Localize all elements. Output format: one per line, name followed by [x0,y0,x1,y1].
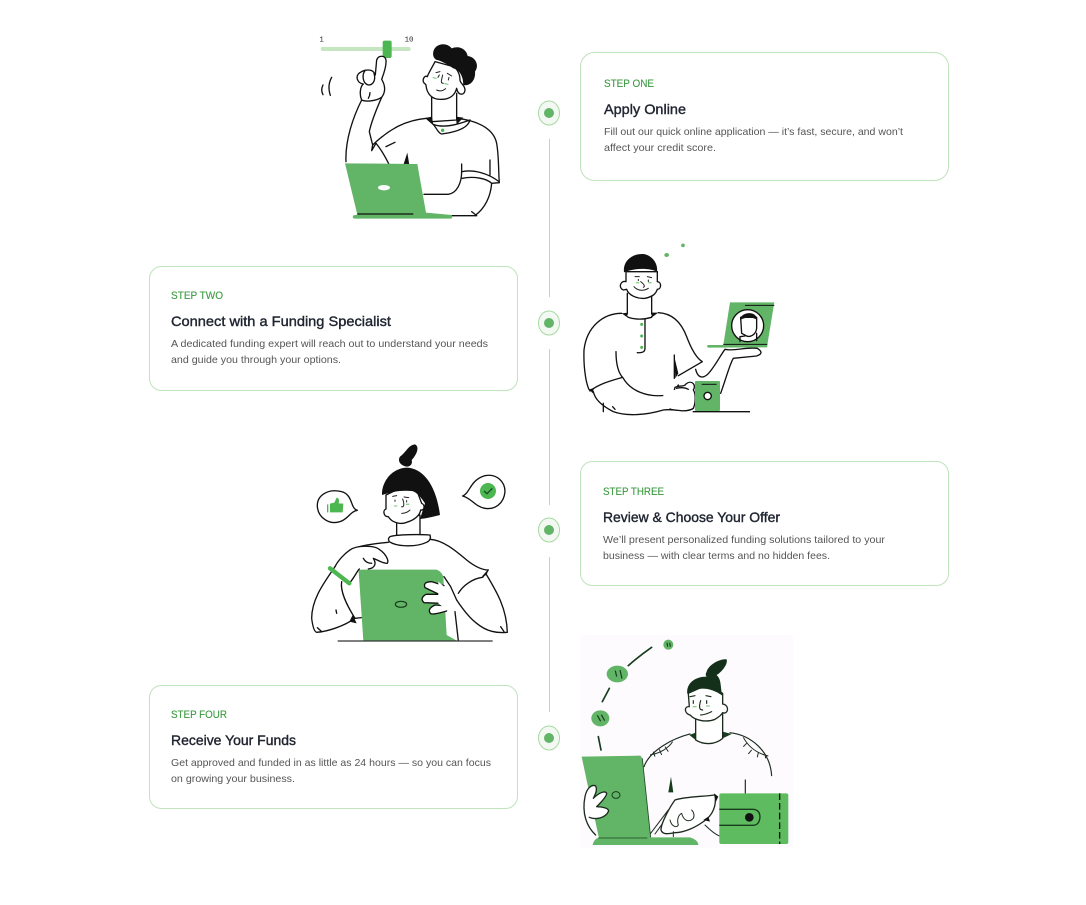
right hand fingers [422,577,457,614]
panel: step two card [150,266,518,390]
text block: step one description [604,126,903,154]
faint background [580,635,793,848]
illustration: man pointing at slider with laptop [319,36,499,219]
heading: receive your funds: Receive Your Funds [171,732,296,748]
hand holding tablet [584,786,609,835]
shirt buttons [640,323,643,349]
fist on mug [670,382,695,411]
torso and shirt [373,118,499,216]
label: step three: STEP THREE [603,486,664,498]
heading: connect with a funding specialist: Connect with a Funding Specialist [171,313,391,329]
raised arm and hand [346,56,386,164]
marker: step four [538,726,560,750]
text block: step one description: affect your credit score. [604,142,716,154]
timeline: vertical connector and markers [538,101,560,750]
bracelet [330,568,349,583]
hair and bun [687,659,727,696]
tablet [359,570,457,641]
table line [338,639,493,643]
neck and collar [689,732,732,740]
text block: step three description: We’ll present personalized funding solutions tailored to your [603,534,885,546]
motion marks [322,77,332,95]
text block: step one description: Fill out our quick online application — it’s fast, secure, and won’t [604,126,903,138]
marker: step two [538,311,560,335]
label: step one: STEP ONE [604,78,654,90]
laptop [345,163,452,219]
mug [695,381,720,411]
laptop with video call [707,302,774,348]
text block: step four description: Get approved and funded in as little as 24 hours — so you can focus [171,757,491,769]
illustration: woman with tablet and wallet [580,635,793,848]
hair [433,44,477,85]
dashed arc and percent coins [591,640,673,750]
text block: step three description: business — with clear terms and no hidden fees. [603,550,830,562]
hair and bun [382,468,440,519]
neck and head [627,293,652,319]
illustration: woman with tablet and speech bubbles [312,444,507,641]
supporting arm and hand [696,348,761,393]
floating specks [664,243,685,257]
text block: step two description: A dedicated funding expert will reach out to understand your needs [171,338,488,350]
text block: step two description [171,338,488,366]
head [685,685,728,721]
body and shirt [312,539,507,641]
speech bubble: thumbs up [317,491,357,523]
neck and collar [397,515,420,538]
marker: step one [538,101,560,125]
hand on tablet edge [338,546,388,575]
tablet on stand [582,756,698,845]
label: step two: STEP TWO [171,290,223,302]
heading: review and choose your offer: Review & Choose Your Offer [603,509,780,525]
text block: step two description: and guide you through your options. [171,354,341,366]
neck and collar [432,93,457,122]
slider [319,36,413,58]
pointing hand [651,793,719,837]
text block: step three description [603,534,885,562]
wallet [719,793,788,844]
head [423,62,465,99]
text block: step four description [171,757,491,785]
panel: step three card [580,462,948,586]
text block: step four description: on growing your business. [171,773,295,785]
panel: step one card [580,52,948,180]
speech bubble: check mark [463,475,505,509]
illustration: man holding laptop with video call and mug [584,243,774,415]
slider: 10 [405,36,413,44]
head [384,488,424,523]
torso and shirt [584,313,702,412]
shirt outline and stitching [644,733,772,793]
folded arm [593,392,693,415]
label: step four: STEP FOUR [171,709,227,721]
heading: apply online: Apply Online [604,101,686,117]
panel: step four card [150,686,518,808]
marker: step three [538,518,560,542]
hair [624,254,657,272]
slider: 1 [319,36,324,44]
table line [693,410,750,414]
